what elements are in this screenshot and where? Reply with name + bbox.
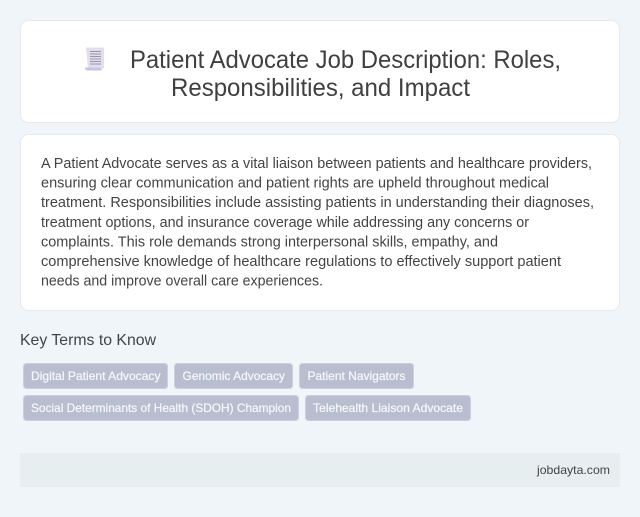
title: Patient Advocate Job Description: Roles, [130,46,561,74]
tag: Digital Patient Advocacy: Digital Patient Advocacy [31,369,160,383]
description text: complaints. This role demands strong interpersonal skills, empathy, and [41,234,498,250]
footer: jobdayta.com [536,463,610,477]
tag: Patient Navigators: Patient Navigators [308,369,406,383]
panel: description [20,134,620,310]
tag: Social Determinants of Health (SDOH) Champion [24,396,298,420]
tag: Digital Patient Advocacy [24,364,168,388]
description text: needs and improve overall care experiences. [41,274,323,290]
description text: treatment. Responsibilities include assisting patients in understanding their diagnoses, [41,195,594,211]
description text: comprehensive knowledge of healthcare regulations to effectively support patient [41,254,561,270]
panel: title card [20,20,620,122]
description text: treatment options, and insurance coverage while addressing any concerns or [41,215,529,231]
footer [20,453,620,487]
tag: Social Determinants of Health (SDOH) Champion: Social Determinants of Health (SDOH) Champion [31,401,291,415]
tag: Telehealth Liaison Advocate: Telehealth Liaison Advocate [313,401,463,415]
tag: Telehealth Liaison Advocate [306,396,470,420]
description text: ensuring clear communication and patient rights are upheld throughout medical [41,176,549,192]
description text: A Patient Advocate serves as a vital liaison between patients and healthcare providers, [41,156,592,172]
description text [41,156,594,290]
icon: document scroll [85,48,104,70]
heading: key terms: Key Terms to Know [20,332,156,349]
tag: Patient Navigators [300,364,414,388]
title [130,46,561,102]
tag: Genomic Advocacy: Genomic Advocacy [182,369,285,383]
tag: Genomic Advocacy [174,364,292,388]
title: Responsibilities, and Impact [171,74,470,102]
